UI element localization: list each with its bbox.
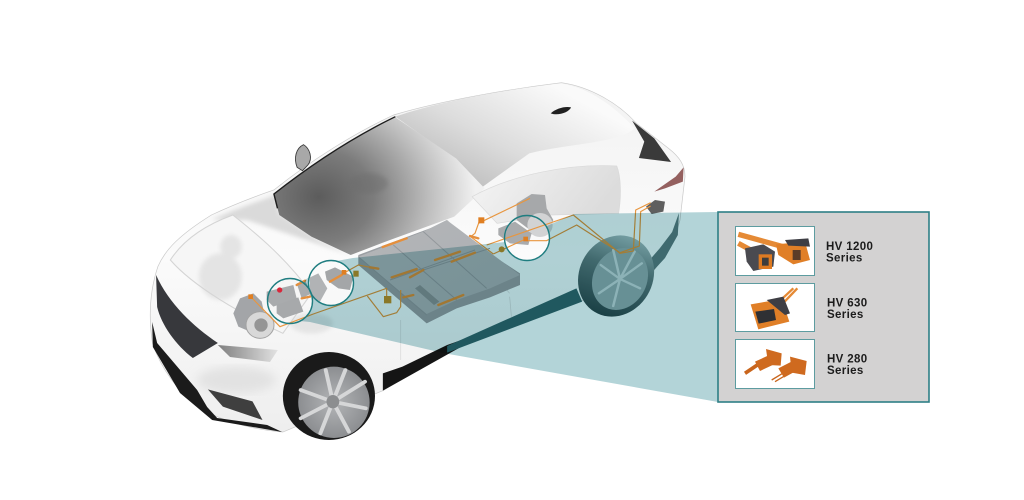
rear glass	[632, 121, 671, 162]
rear body corner shade	[648, 213, 679, 272]
HV 280 connector drawing	[745, 349, 807, 382]
rear charging inlet	[646, 200, 665, 214]
front hub	[326, 395, 339, 408]
card frame	[736, 226, 814, 276]
windscreen	[274, 117, 485, 255]
hood panel outline	[170, 215, 311, 333]
shark fin antenna	[551, 107, 571, 114]
converter box	[310, 273, 327, 302]
battery cell comb	[415, 285, 439, 305]
orange busbars	[297, 236, 478, 305]
inverter box	[297, 281, 312, 298]
label: HV 1200 Series: HV 1200	[826, 241, 873, 253]
rear module	[498, 222, 532, 245]
HV 1200 connector drawing	[738, 234, 810, 271]
illustration: white electric SUV	[150, 83, 685, 440]
card frame	[736, 284, 814, 332]
motor housing	[233, 293, 265, 332]
front motor	[233, 293, 274, 338]
card: HV 1200 product	[736, 226, 814, 276]
rear motor disc	[527, 213, 553, 237]
heater box with red mark	[267, 285, 297, 307]
label: HV 630 Series: HV 630	[827, 298, 867, 310]
tail light	[654, 167, 684, 192]
battery side wall	[358, 223, 520, 323]
roof	[395, 83, 635, 187]
wing mirror	[295, 145, 310, 171]
front air intake	[208, 389, 262, 420]
fender shading	[211, 195, 351, 255]
panel background	[718, 212, 929, 402]
panel: connector series	[718, 212, 929, 402]
motor end disc	[246, 312, 274, 338]
label: HV 630 Series: Series	[827, 309, 864, 321]
front spokes	[301, 370, 366, 433]
front wheel	[283, 352, 375, 440]
orange connectors	[248, 217, 528, 303]
rear motor	[498, 194, 553, 245]
windscreen frame	[274, 117, 395, 208]
battery seams	[358, 232, 490, 315]
side sill, black part	[383, 340, 461, 391]
red symbol	[277, 287, 282, 293]
infographic: EV high-voltage connector overview	[150, 82, 930, 440]
label: HV 280 Series: HV 280	[827, 354, 867, 366]
component boxes: battery chargers	[267, 267, 353, 318]
label: HV 1200 Series: Series	[826, 252, 863, 264]
front tyre	[283, 352, 375, 440]
teal projection beam	[290, 212, 718, 402]
DC box	[325, 267, 353, 290]
powertrain components and HV cabling	[233, 194, 665, 338]
battery pack	[358, 220, 520, 323]
rear wheel	[566, 225, 666, 327]
bumper shading	[197, 367, 276, 393]
side window	[472, 166, 620, 223]
label: HV 280 Series: Series	[827, 365, 864, 377]
rear tyre	[566, 225, 666, 327]
front grille	[156, 275, 218, 358]
HV 630 connector drawing	[751, 288, 797, 329]
front rim	[298, 367, 370, 438]
headlight	[218, 345, 278, 362]
door line	[401, 220, 511, 360]
rear spokes	[599, 250, 642, 306]
snow box	[277, 297, 303, 318]
card: HV 280 product	[736, 340, 814, 388]
side sill, rear part	[447, 288, 582, 353]
highlight circle: rear modules	[504, 216, 550, 260]
interior seat ghost	[349, 173, 388, 193]
rear rim	[583, 241, 657, 317]
lower front lip	[152, 322, 282, 432]
battery top	[358, 220, 520, 314]
highlight circle: front modules	[268, 278, 312, 324]
card: HV 630 product	[736, 284, 814, 332]
car body	[150, 83, 685, 432]
ghosted engine bay shadow	[199, 235, 333, 333]
orange high voltage cables	[251, 198, 651, 327]
motor disc hub	[254, 318, 268, 332]
card frame	[736, 340, 814, 388]
rear motor housing	[517, 194, 553, 233]
highlight circle: junction modules	[308, 260, 354, 306]
